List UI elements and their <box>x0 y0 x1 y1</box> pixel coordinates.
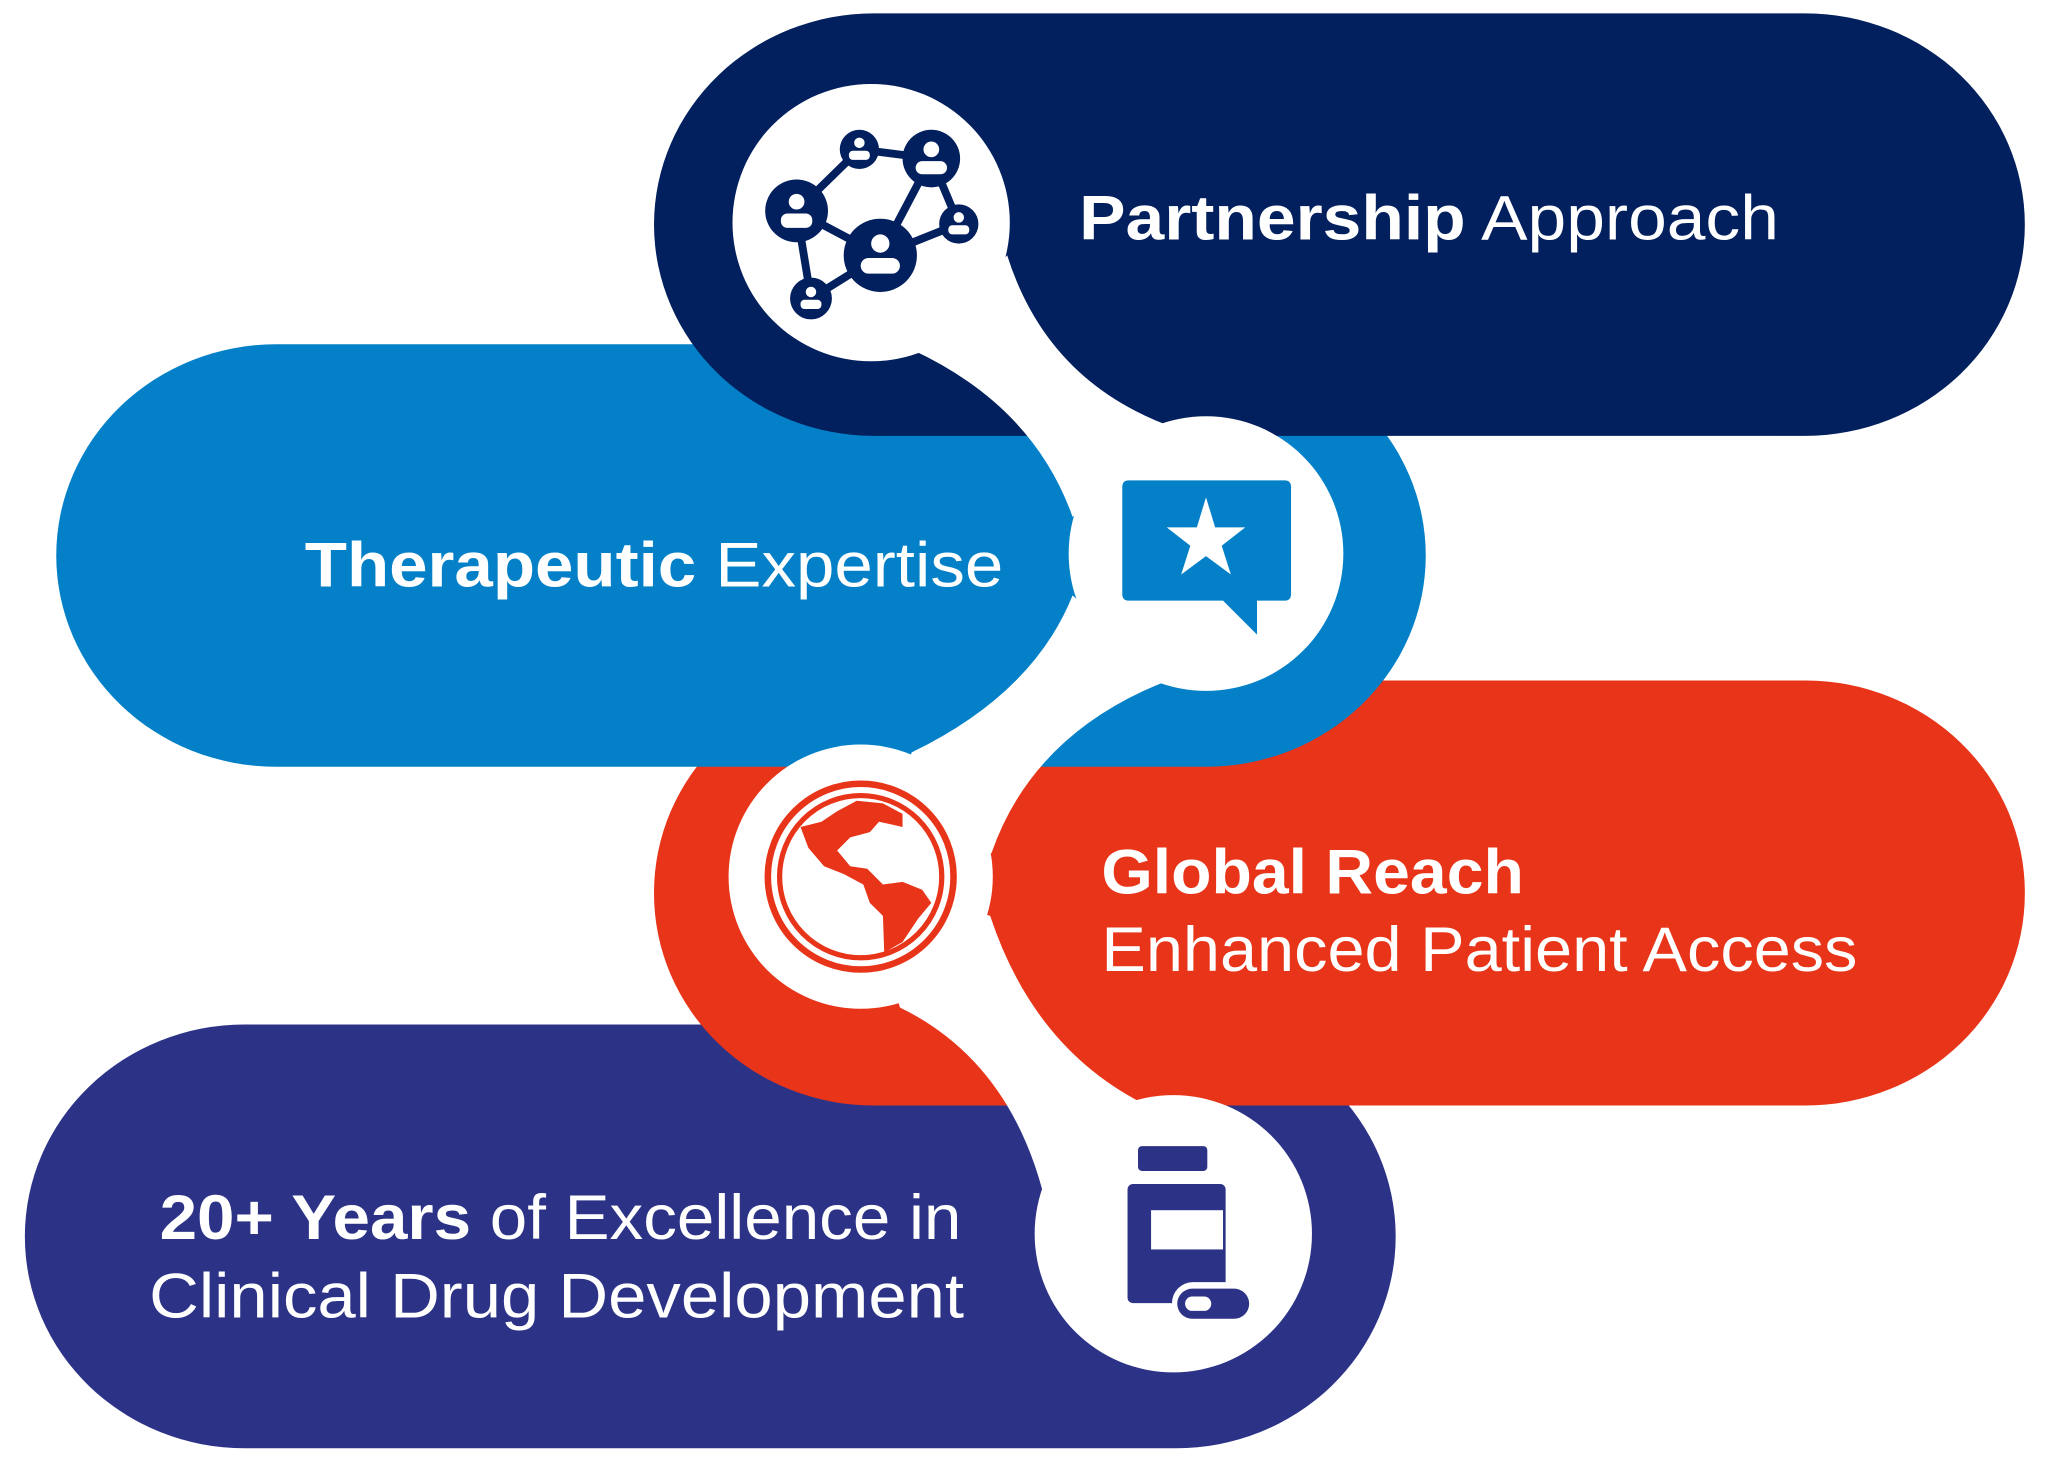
title: global reach: Global Reach <box>1101 838 1524 908</box>
title: therapeutic expertise: Therapeutic Expertise <box>305 530 1003 600</box>
title: years of excellence: Clinical Drug Development <box>149 1261 964 1331</box>
panel: partnership approach <box>654 13 2025 436</box>
white snake connector <box>729 84 1343 1372</box>
icon: medicine bottle <box>1128 1146 1253 1324</box>
title: years of excellence <box>149 1183 964 1331</box>
subtitle: enhanced patient access: Enhanced Patient Access <box>1101 915 1857 985</box>
panel: global reach <box>654 680 2025 1106</box>
title: years of excellence: 20+ Years of Excellence in <box>160 1183 961 1253</box>
icon: globe <box>768 784 954 970</box>
icon: partner network <box>765 130 978 319</box>
icon: star speech bubble <box>1122 480 1291 635</box>
panel: years of excellence <box>25 1024 1396 1448</box>
title: partnership approach: Partnership Approach <box>1079 184 1779 254</box>
panel: therapeutic expertise <box>56 344 1426 767</box>
